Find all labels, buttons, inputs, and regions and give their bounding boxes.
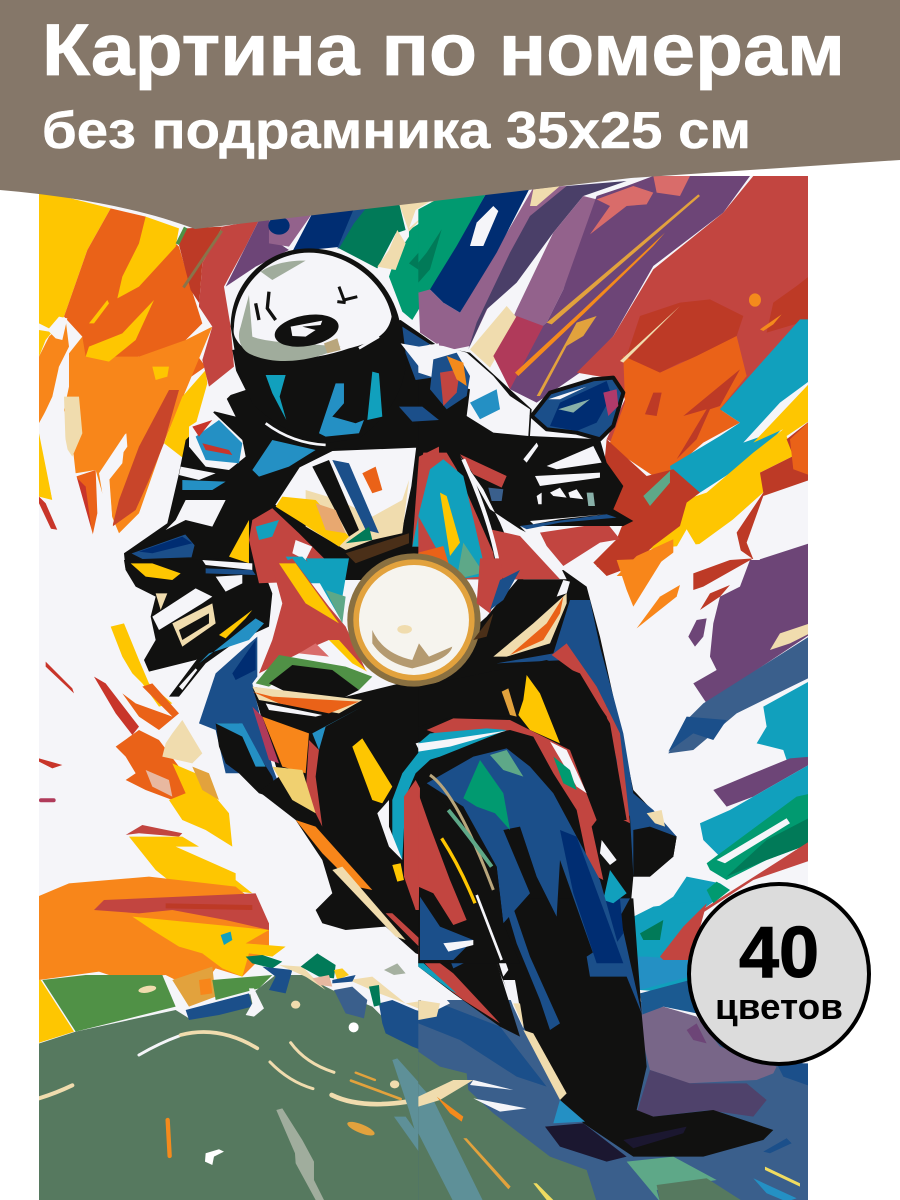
badge: 40 colours: 40 (739, 913, 819, 993)
painting: motorcyclist on colourful background (37, 176, 812, 1200)
background: upper-right strokes (418, 176, 812, 579)
rider: right arm and mirror (418, 344, 623, 579)
rider: helmet, suit and arms (129, 248, 439, 560)
left mirror (132, 534, 194, 559)
motorcycle: right fairing, fender and front wheel colours (418, 558, 677, 963)
badge: 40 colours (689, 884, 869, 1064)
title: Картина по номерам (42, 10, 845, 91)
background: lower right strokes (418, 900, 812, 1200)
background: lower left splashes and orange field (39, 623, 252, 893)
rider and motorcycle black mass (124, 320, 773, 1162)
banner (0, 0, 900, 229)
right glove (520, 443, 617, 529)
background: right side strokes (596, 558, 808, 912)
helmet (231, 248, 406, 445)
headlight (347, 553, 481, 687)
left glove details (131, 560, 264, 690)
badge: 40 colours: цветов (715, 986, 843, 1027)
subtitle: без подрамника 35х25 см (42, 102, 751, 160)
background: upper-left warm strokes (39, 194, 436, 534)
motorcycle: windshield and fairing (229, 447, 441, 583)
